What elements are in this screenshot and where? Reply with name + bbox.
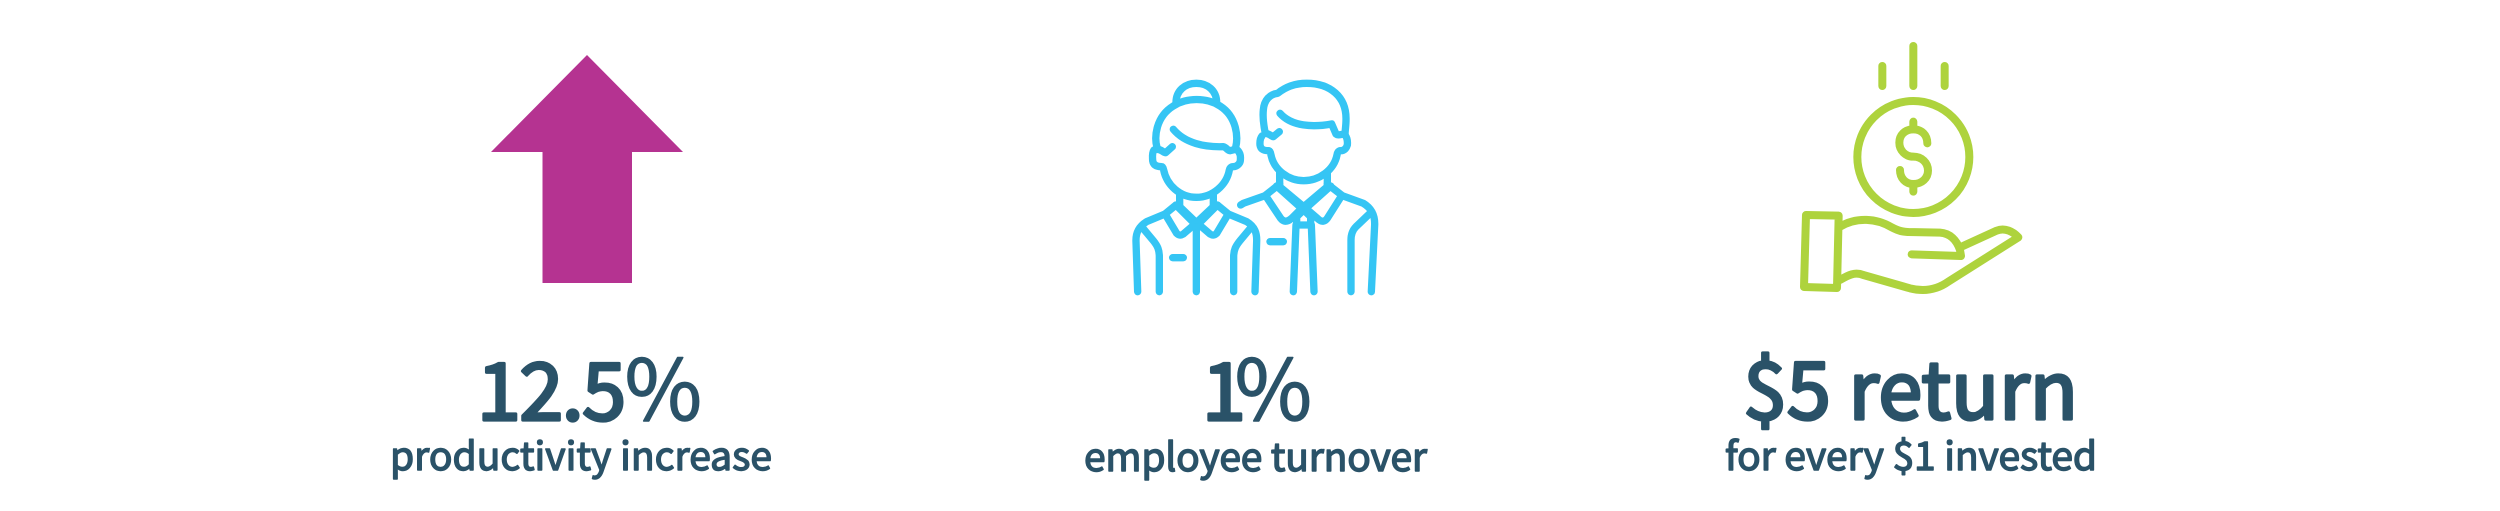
- hand: [1840, 220, 2018, 290]
- label: employee turnover: employee turnover: [1084, 427, 1428, 483]
- woman: [1136, 83, 1257, 292]
- coin: [1857, 101, 1969, 213]
- panel: turnover: [1084, 83, 1428, 483]
- stat: $5 return: $5 return: [1743, 327, 2078, 442]
- label: for every $1 invested: for every $1 invested: [1725, 426, 2097, 482]
- panel: return: [1725, 46, 2097, 482]
- falling lines: [1882, 46, 1945, 86]
- panel: productivity: [390, 55, 772, 482]
- label: productivity increase: productivity increase: [390, 426, 772, 482]
- cuff: [1804, 215, 1839, 288]
- stat: 12.5%: 12.5%: [477, 324, 702, 445]
- dollar sign: [1899, 122, 1928, 192]
- stat: 1%: 1%: [1202, 324, 1312, 445]
- icon: up arrow: [491, 55, 683, 283]
- icon: coin over hand: [1804, 46, 2018, 290]
- man: [1241, 83, 1375, 292]
- icon: two employees: [1136, 83, 1375, 292]
